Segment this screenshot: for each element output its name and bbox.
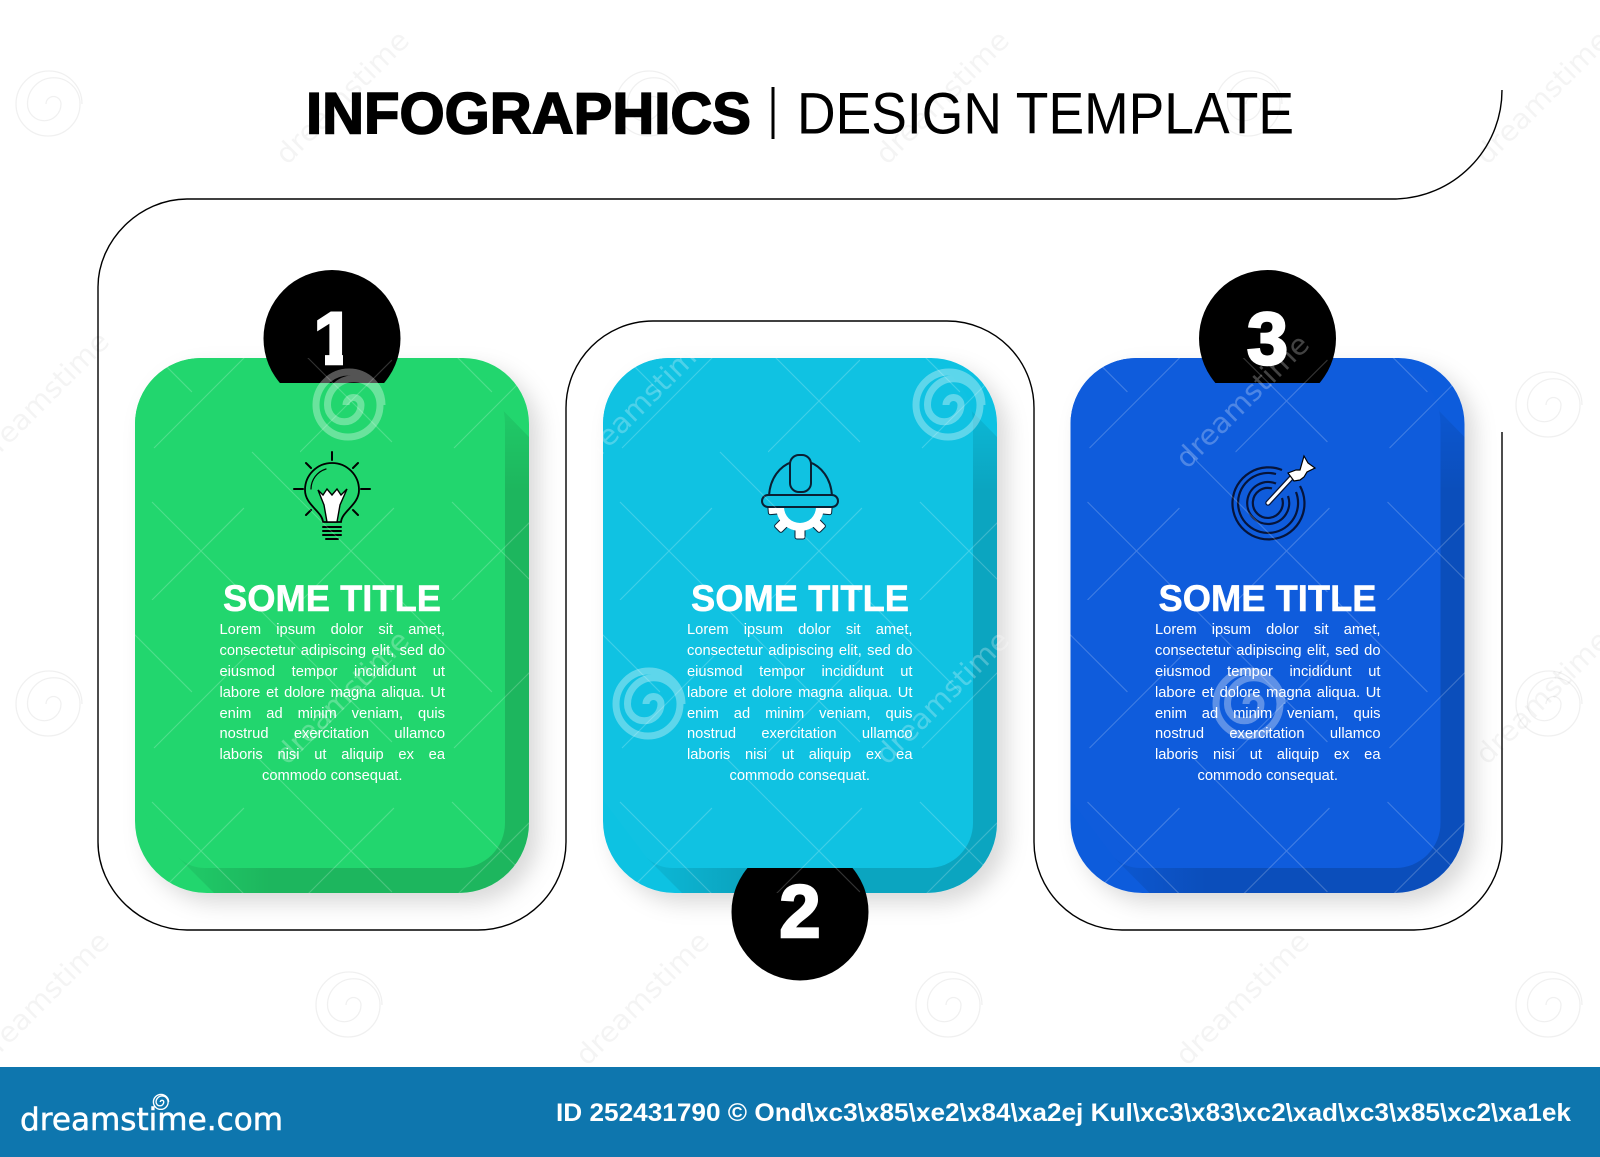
card 2 body text: nostrud exercitation ullamco xyxy=(687,726,912,742)
title separator xyxy=(772,87,774,139)
badge 2: 2 xyxy=(779,870,821,953)
card 1 body text: nostrud exercitation ullamco xyxy=(220,726,445,742)
card 2 heading: SOME TITLE xyxy=(691,577,909,619)
card 2 body xyxy=(603,358,997,893)
card 3 body text xyxy=(1155,620,1381,790)
watermark text on cards xyxy=(269,328,1316,771)
badge 2 xyxy=(732,868,868,980)
card 2 body text: consectetur adipiscing elit, sed do xyxy=(687,643,912,659)
card 1 body text: consectetur adipiscing elit, sed do xyxy=(220,643,445,659)
panel: card 1 green xyxy=(135,270,529,893)
card 3 body text: commodo consequat. xyxy=(1198,768,1338,784)
watermark text on cards: dreamstime xyxy=(869,624,1016,771)
footer background xyxy=(0,1067,1600,1157)
title regular part: DESIGN TEMPLATE xyxy=(797,82,1294,146)
card 1 body text: Lorem ipsum dolor sit amet, xyxy=(220,622,445,638)
badge 1 xyxy=(264,270,400,383)
connector outline xyxy=(98,90,1502,930)
card 2 body text: Lorem ipsum dolor sit amet, xyxy=(687,622,912,638)
card 1 body xyxy=(135,358,529,893)
card 2 body text: commodo consequat. xyxy=(730,768,870,784)
card 2 body text: labore et dolore magna aliqua. Ut xyxy=(687,685,912,701)
card 3 heading: SOME TITLE xyxy=(1158,577,1376,619)
faint page watermarks: dreamstime xyxy=(869,24,1016,171)
card 2 body text: laboris nisi ut aliquip ex ea xyxy=(687,747,912,763)
panel: card 2 cyan xyxy=(603,358,997,980)
watermark text on cards: dreamstime xyxy=(269,624,416,771)
card 2 body text: eiusmod tempor incididunt ut xyxy=(687,664,912,680)
card 3 body text: laboris nisi ut aliquip ex ea xyxy=(1155,747,1380,763)
icon: hard hat with gear xyxy=(762,455,838,539)
card 1 body text: laboris nisi ut aliquip ex ea xyxy=(220,747,445,763)
card 1 heading: SOME TITLE xyxy=(223,577,441,619)
icon: target with arrow xyxy=(1232,456,1315,539)
card 3 body text: eiusmod tempor incididunt ut xyxy=(1155,664,1380,680)
faint page watermarks: dreamstime xyxy=(269,24,416,171)
card 2 body text xyxy=(687,620,913,790)
card 3 body text: enim ad minim veniam, quis xyxy=(1155,706,1380,722)
watermark text on cards: dreamstime xyxy=(569,328,716,475)
footer logo: dreamstime.com xyxy=(20,1102,283,1138)
card 3 body text: consectetur adipiscing elit, sed do xyxy=(1155,643,1380,659)
card 3 body text: nostrud exercitation ullamco xyxy=(1155,726,1380,742)
badge 3 xyxy=(1199,270,1336,383)
card 1 body text xyxy=(220,620,446,790)
badge 1: 1 xyxy=(313,297,355,380)
card 3 body text: labore et dolore magna aliqua. Ut xyxy=(1155,685,1380,701)
card 1 body text: eiusmod tempor incididunt ut xyxy=(220,664,445,680)
faint page watermarks: dreamstime xyxy=(569,925,716,1072)
card 2 body text: enim ad minim veniam, quis xyxy=(687,706,912,722)
card 1 body text: enim ad minim veniam, quis xyxy=(220,706,445,722)
badge 3: 3 xyxy=(1247,297,1288,380)
footer credit: ID 252431790 © Ond\xc3\x85\xe2\x84\xa2ej Kul\xc3\x83\xc2\xad\xc3\x85\xc2\xa1ek xyxy=(556,1099,1571,1127)
watermark swirls on cards xyxy=(316,372,1282,736)
card 1 body text: commodo consequat. xyxy=(262,768,402,784)
card 3 body text: Lorem ipsum dolor sit amet, xyxy=(1155,622,1380,638)
card 1 body text: labore et dolore magna aliqua. Ut xyxy=(220,685,445,701)
icon: light bulb xyxy=(294,452,370,539)
panel: card 3 blue xyxy=(1070,270,1464,893)
faint page watermarks: dreamstime xyxy=(1169,925,1316,1072)
title bold part: INFOGRAPHICS xyxy=(306,82,751,146)
watermark lattice on cards xyxy=(135,358,1464,893)
title xyxy=(306,82,1294,146)
footer bar xyxy=(0,1067,1600,1157)
watermark text on cards: dreamstime xyxy=(1169,328,1316,475)
card 3 body xyxy=(1070,358,1464,893)
